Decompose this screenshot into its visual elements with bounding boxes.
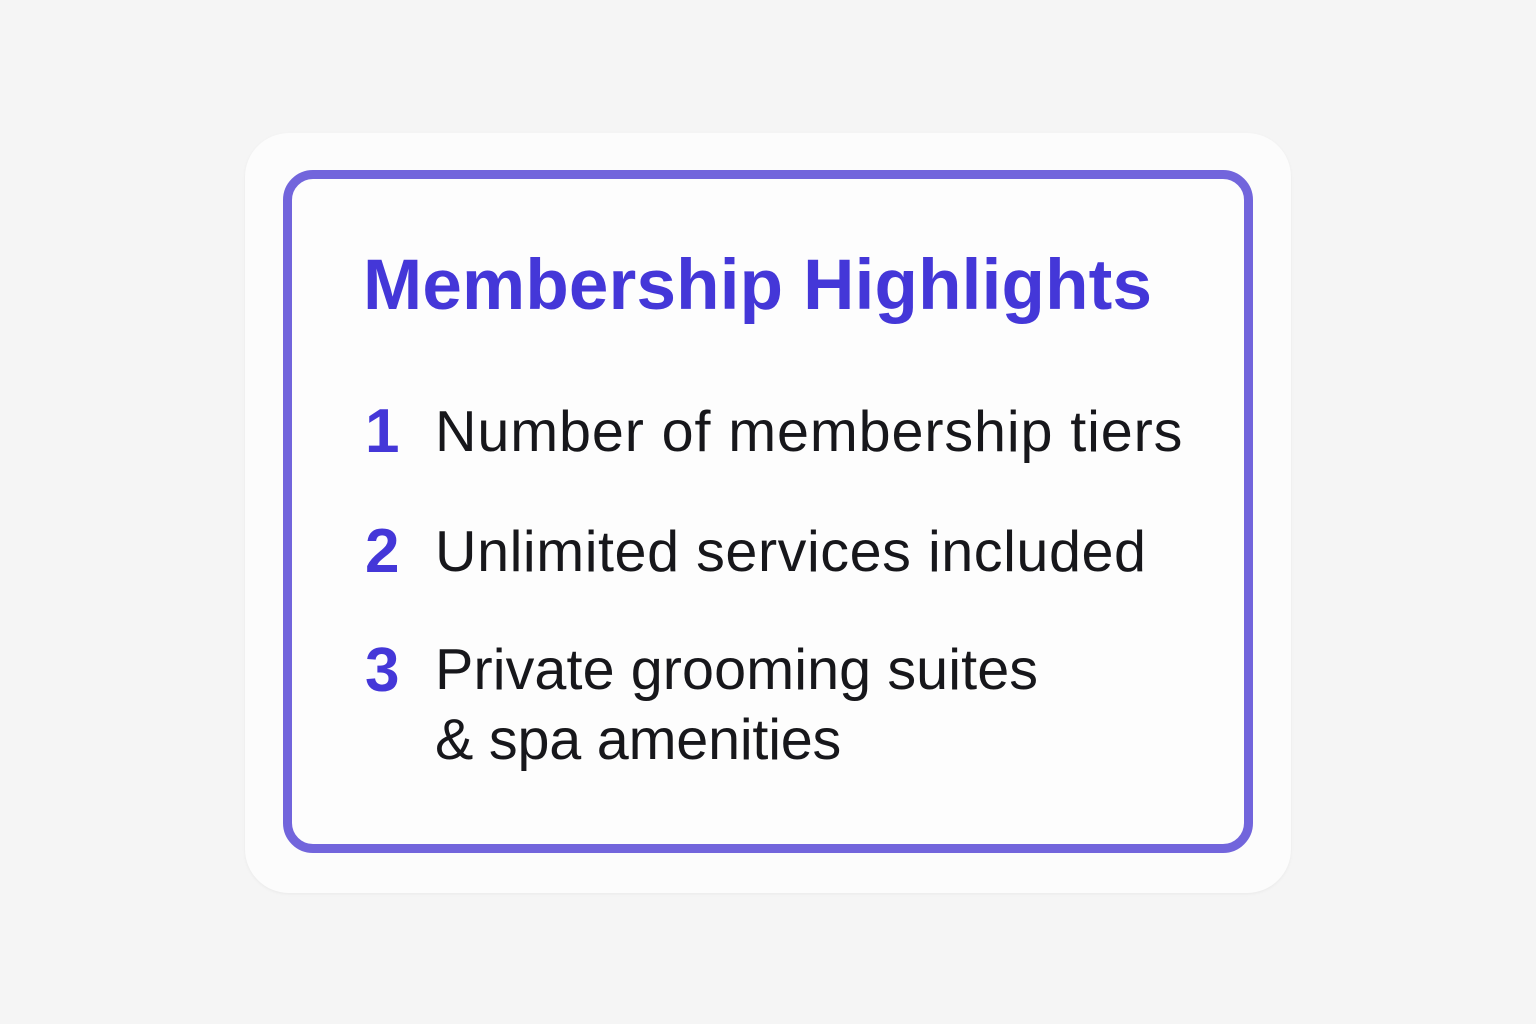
title: Membership Highlights	[363, 246, 1152, 325]
list item 2	[365, 517, 1147, 586]
number 3: 3	[365, 636, 399, 705]
panel: outer card	[245, 133, 1291, 893]
text: suites: & spa amenities	[435, 708, 841, 772]
number 1: 1	[365, 397, 399, 466]
list item 1	[365, 397, 1183, 466]
text: services: Unlimited services included	[435, 520, 1147, 584]
text: suites	[435, 638, 1038, 772]
panel: purple outlined frame	[283, 170, 1253, 853]
text: tiers: Number of membership tiers	[435, 400, 1183, 464]
text: suites: Private grooming suites	[435, 638, 1038, 702]
number 2: 2	[365, 517, 399, 586]
list item 3	[365, 636, 1038, 772]
